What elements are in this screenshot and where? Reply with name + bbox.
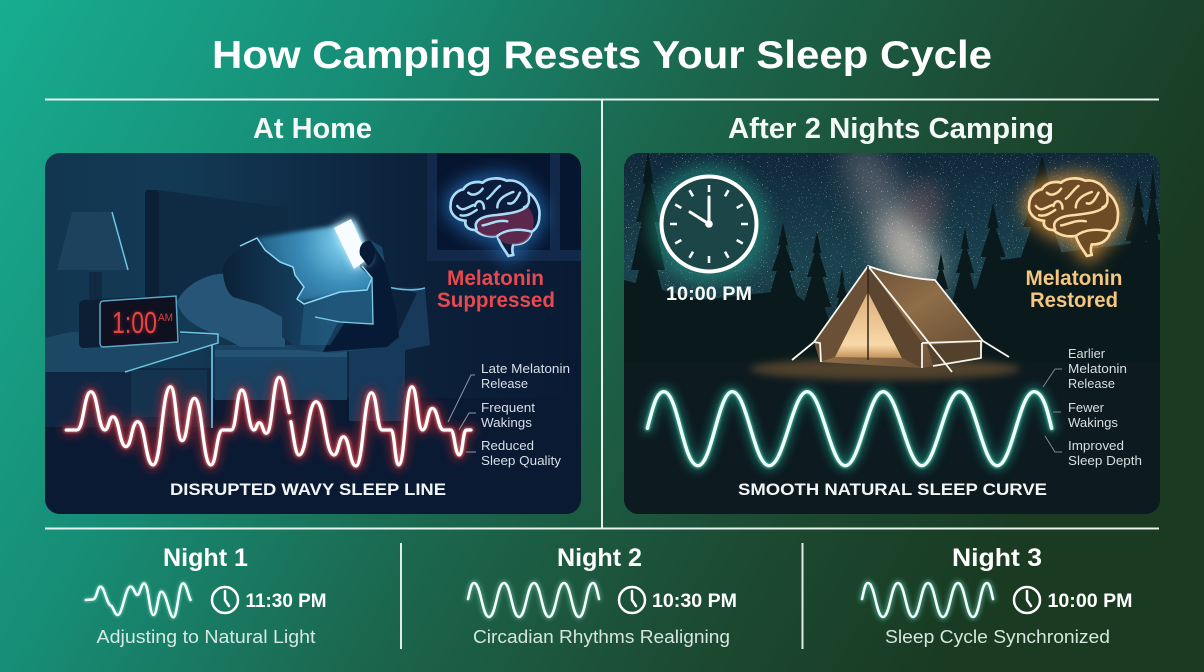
night 1 heading: Night 1 xyxy=(163,544,248,572)
alarm clock xyxy=(79,295,180,348)
annotations: camping effects xyxy=(1068,346,1142,468)
annotation leader lines xyxy=(448,375,476,452)
annotations: camping effects: Fewer xyxy=(1068,400,1105,415)
window xyxy=(427,153,581,261)
pine forest xyxy=(622,150,1171,514)
annotation leader lines xyxy=(1043,369,1062,452)
annotations: camping effects: Improved xyxy=(1068,438,1124,453)
night 2 xyxy=(468,544,737,647)
nightstand xyxy=(45,332,218,428)
night 3 xyxy=(862,544,1132,647)
annotations: camping effects: Earlier xyxy=(1068,346,1106,361)
annotations: home effects: Sleep Quality xyxy=(481,453,562,468)
annotations: home effects: Wakings xyxy=(481,415,533,430)
night 2 wave xyxy=(468,583,599,617)
night 1 time: 11:30 PM xyxy=(246,591,326,612)
annotations: home effects: Release xyxy=(481,376,528,391)
night 1 clock icon xyxy=(212,587,238,613)
night 2 time: 10:30 PM xyxy=(652,591,737,612)
label: melatonin suppressed: Suppressed xyxy=(437,289,555,312)
annotations: home effects xyxy=(481,361,570,468)
label: melatonin restored: Restored xyxy=(1030,289,1118,312)
night 2 caption: Circadian Rhythms Realigning xyxy=(473,627,730,647)
night 3 heading: Night 3 xyxy=(952,544,1042,572)
night 1 xyxy=(86,544,327,647)
headboard xyxy=(145,190,260,300)
pillow xyxy=(177,274,285,347)
wave caption: SMOOTH NATURAL SLEEP CURVE xyxy=(738,480,1047,499)
heading: At Home: At Home xyxy=(253,113,372,145)
night 3 clock icon xyxy=(1014,587,1040,613)
label: melatonin restored xyxy=(1026,270,1122,307)
annotations: camping effects: Wakings xyxy=(1068,415,1118,430)
label: melatonin suppressed xyxy=(437,267,555,312)
annotations: camping effects: Sleep Depth xyxy=(1068,453,1142,468)
night 2 clock icon xyxy=(619,587,645,613)
title: How Camping Resets Your Sleep Cycle xyxy=(212,34,992,77)
annotations: home effects: Frequent xyxy=(481,400,535,415)
bed xyxy=(215,287,430,421)
panel: after camping xyxy=(622,129,1171,514)
tent xyxy=(792,266,1009,372)
alarm clock: 1:00 xyxy=(112,305,157,340)
disrupted sleep wave xyxy=(66,377,471,466)
brain icon: restored xyxy=(1029,178,1118,256)
annotations: camping effects: Melatonin xyxy=(1068,361,1127,376)
ground xyxy=(624,355,1022,514)
alarm clock: 1:00 xyxy=(112,305,157,340)
wave caption: DISRUPTED WAVY SLEEP LINE xyxy=(170,480,446,499)
stars xyxy=(624,153,1160,333)
annotations: home effects: Late Melatonin xyxy=(481,361,570,376)
night 3 caption: Sleep Cycle Synchronized xyxy=(885,627,1110,647)
night 3 wave xyxy=(862,583,993,617)
night 3 time: 10:00 PM xyxy=(1048,591,1132,612)
smooth sleep wave xyxy=(647,392,1052,466)
night 1 caption: Adjusting to Natural Light xyxy=(96,627,316,647)
phone xyxy=(333,217,375,270)
clock icon: 10:00 xyxy=(649,164,769,284)
heading: After 2 Nights Camping: After 2 Nights Camping xyxy=(728,113,1054,145)
label: melatonin restored: Melatonin xyxy=(1026,267,1122,290)
panel: at home xyxy=(45,153,581,514)
light beam from phone xyxy=(257,222,374,302)
person lying in bed xyxy=(223,238,399,353)
brain icon: suppressed xyxy=(450,178,540,256)
label: melatonin suppressed: Melatonin xyxy=(447,267,544,290)
clock time label: 10:00 PM xyxy=(666,284,752,305)
alarm clock: AM xyxy=(158,312,173,324)
milky way xyxy=(832,153,957,294)
annotations: home effects: Reduced xyxy=(481,438,534,453)
night 1 wave xyxy=(86,583,191,617)
annotations: camping effects: Release xyxy=(1068,376,1115,391)
night 2 heading: Night 2 xyxy=(557,544,642,572)
lamp xyxy=(57,212,128,299)
